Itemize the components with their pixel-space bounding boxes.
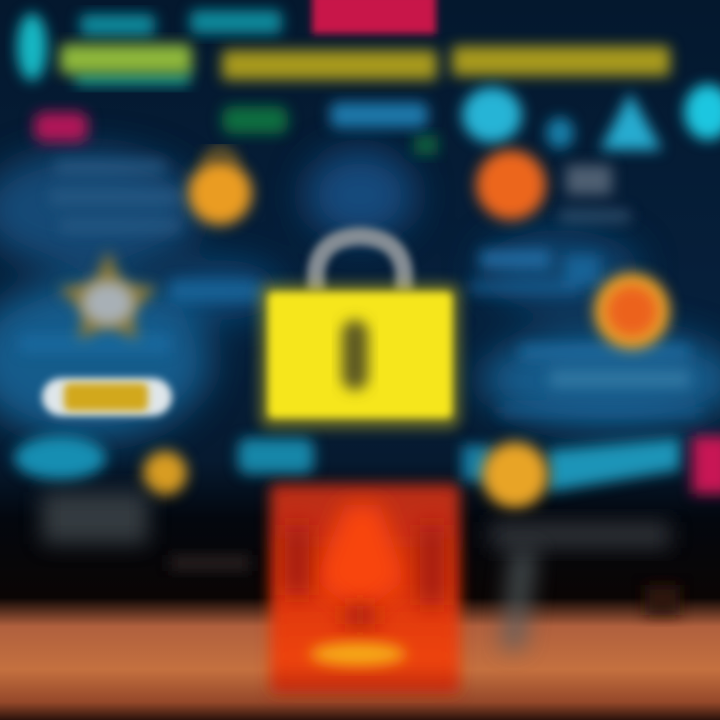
left text lines: [20, 160, 260, 353]
cyan centre label: [238, 438, 314, 474]
dark text trace: [170, 555, 250, 571]
cyan cloud icon 1: [462, 87, 522, 143]
star centre: [82, 281, 134, 325]
cyan cloud icon 2: [600, 92, 662, 150]
icon row: [34, 84, 720, 155]
star badge: [58, 250, 158, 340]
red box: [270, 484, 460, 694]
cyan label: [548, 438, 680, 492]
pink label: [34, 112, 88, 142]
cyan cloud icon 3: [684, 84, 720, 140]
yellow badge: [143, 451, 187, 495]
cyan header icon: [17, 13, 47, 81]
padlock glow: [260, 284, 460, 428]
right grey and blue text: [470, 165, 700, 415]
pink badge: [692, 436, 720, 494]
grey text block: [42, 492, 148, 544]
green glow under title: [75, 70, 190, 86]
yellow circle: [482, 442, 548, 508]
red box body: [270, 484, 460, 694]
lower left group: [14, 436, 250, 571]
orange core: [606, 285, 658, 337]
central padlock: [260, 236, 460, 428]
orange circle upper right: [476, 150, 546, 220]
header text band: [17, 0, 670, 86]
cyan small icon: [546, 117, 574, 149]
star outline: [58, 250, 158, 340]
lower right group: [462, 436, 720, 650]
green mark: [414, 135, 438, 155]
background blue haze: [0, 150, 720, 440]
red box bottom glow: [310, 642, 406, 666]
padlock shackle: [316, 236, 404, 292]
padlock keyhole: [342, 320, 368, 390]
orange circle right: [594, 273, 670, 349]
brown trace: [645, 585, 680, 615]
cyan connector: [462, 445, 492, 481]
badge circle: [188, 161, 252, 225]
padlock body: [268, 292, 452, 418]
teal header text: [80, 14, 155, 36]
grey text block: [490, 522, 670, 548]
pill label: [42, 378, 172, 416]
yellow ring: [594, 273, 670, 349]
grey stem: [500, 550, 538, 650]
red box highlights: [315, 505, 405, 615]
pill fill: [64, 383, 148, 411]
badge shackle: [205, 150, 236, 165]
green and yellow title start: [60, 44, 192, 74]
cyan label: [14, 436, 106, 480]
blue label: [330, 102, 428, 128]
yellow title: [222, 46, 670, 80]
red box dark patches: [285, 525, 444, 625]
red top banner: [312, 0, 436, 34]
orange lock badge: [188, 150, 252, 225]
green label: [222, 106, 288, 134]
pill outline: [42, 378, 172, 416]
